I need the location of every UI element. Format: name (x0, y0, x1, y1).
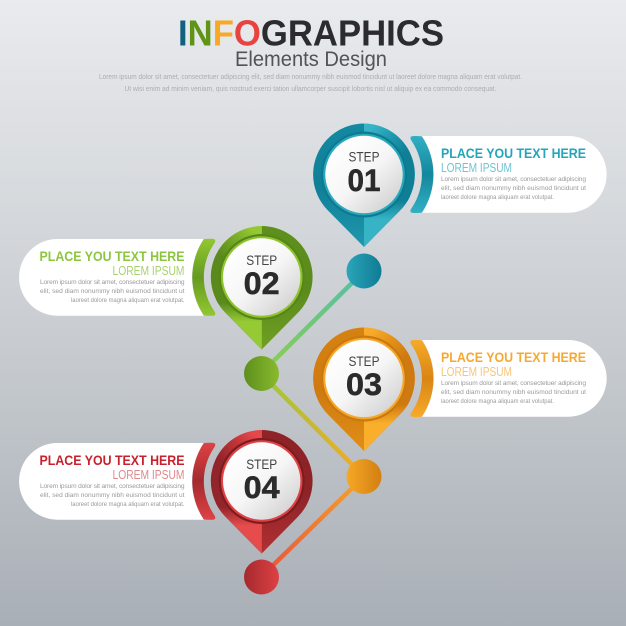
connector lines (261, 271, 364, 577)
subheading 4: LOREM IPSUM (112, 468, 184, 482)
heading 1: PLACE YOU TEXT HERE (441, 145, 586, 161)
dot 3 (346, 459, 382, 494)
heading 3: PLACE YOU TEXT HERE (441, 349, 586, 365)
step number 2: 02 (244, 265, 280, 301)
intro text: Lorem ipsum dolor sit amet, consectetuer adipiscing elit, sed diam nonummy nibh euismod tincidunt ut laoreet dolore magna aliquam erat volutpat. (99, 72, 522, 81)
crescent 2 (192, 239, 215, 316)
pin 4 (211, 430, 313, 554)
body 2: Lorem ipsum dolor sit amet, consectetuer adipiscing (40, 279, 185, 286)
crescent 3 (410, 340, 433, 417)
intro text (99, 72, 522, 93)
crescent 1 (410, 136, 433, 213)
dot 1 (346, 254, 382, 288)
body 2: laoreet dolore magna aliquam erat volutpat. (71, 297, 185, 304)
pin 2 (211, 226, 313, 350)
body 1 (441, 176, 586, 201)
body 4: elit, sed diam nonummy nibh euismod tincidunt ut (40, 492, 185, 499)
body 3 (441, 380, 586, 405)
body 1: Lorem ipsum dolor sit amet, consectetuer adipiscing (441, 176, 586, 183)
body 4: Lorem ipsum dolor sit amet, consectetuer adipiscing (40, 483, 185, 490)
step number 3: 03 (346, 366, 382, 402)
step 4 panel (19, 430, 313, 554)
pin 3 (313, 328, 415, 451)
heading 2: PLACE YOU TEXT HERE (40, 248, 184, 264)
crescent 4 (192, 443, 215, 520)
step label 1: STEP (348, 149, 380, 164)
step label 4: STEP (246, 457, 277, 472)
step label 2: STEP (246, 253, 277, 268)
title: INFOGRAPHICS (178, 12, 444, 54)
body 2: elit, sed diam nonummy nibh euismod tincidunt ut (40, 288, 185, 295)
body 2 (40, 279, 185, 304)
body 4 (40, 483, 185, 508)
text pill 4 (19, 443, 204, 520)
subheading 1: LOREM IPSUM (441, 161, 512, 175)
body 1: elit, sed diam nonummy nibh euismod tincidunt ut (441, 185, 586, 192)
intro text: Ut wisi enim ad minim veniam, quis nostrud exerci tation ullamcorper suscipit lobortis nisl ut aliquip ex ea commodo consequat. (124, 84, 496, 93)
step 1 panel (313, 124, 607, 247)
body 3: laoreet dolore magna aliquam erat volutpat. (441, 398, 554, 405)
subheading 3: LOREM IPSUM (441, 365, 512, 379)
subtitle: Elements Design (235, 48, 387, 71)
body 3: elit, sed diam nonummy nibh euismod tincidunt ut (441, 389, 586, 396)
text pill 3 (422, 340, 607, 417)
body 1: laoreet dolore magna aliquam erat volutpat. (441, 194, 554, 201)
text pill 2 (19, 239, 204, 316)
subheading 2: LOREM IPSUM (112, 264, 184, 278)
heading 4: PLACE YOU TEXT HERE (40, 452, 184, 468)
step 3 panel (313, 328, 607, 451)
text pill 1 (422, 136, 607, 213)
dot 4 (244, 560, 279, 594)
step label 3: STEP (348, 354, 380, 369)
step number 4: 04 (244, 469, 280, 505)
step 2 panel (19, 226, 313, 350)
pin 1 (313, 124, 415, 247)
body 3: Lorem ipsum dolor sit amet, consectetuer adipiscing (441, 380, 586, 387)
body 4: laoreet dolore magna aliquam erat volutpat. (71, 501, 185, 508)
step number 1: 01 (348, 162, 380, 198)
dot 2 (244, 356, 279, 391)
